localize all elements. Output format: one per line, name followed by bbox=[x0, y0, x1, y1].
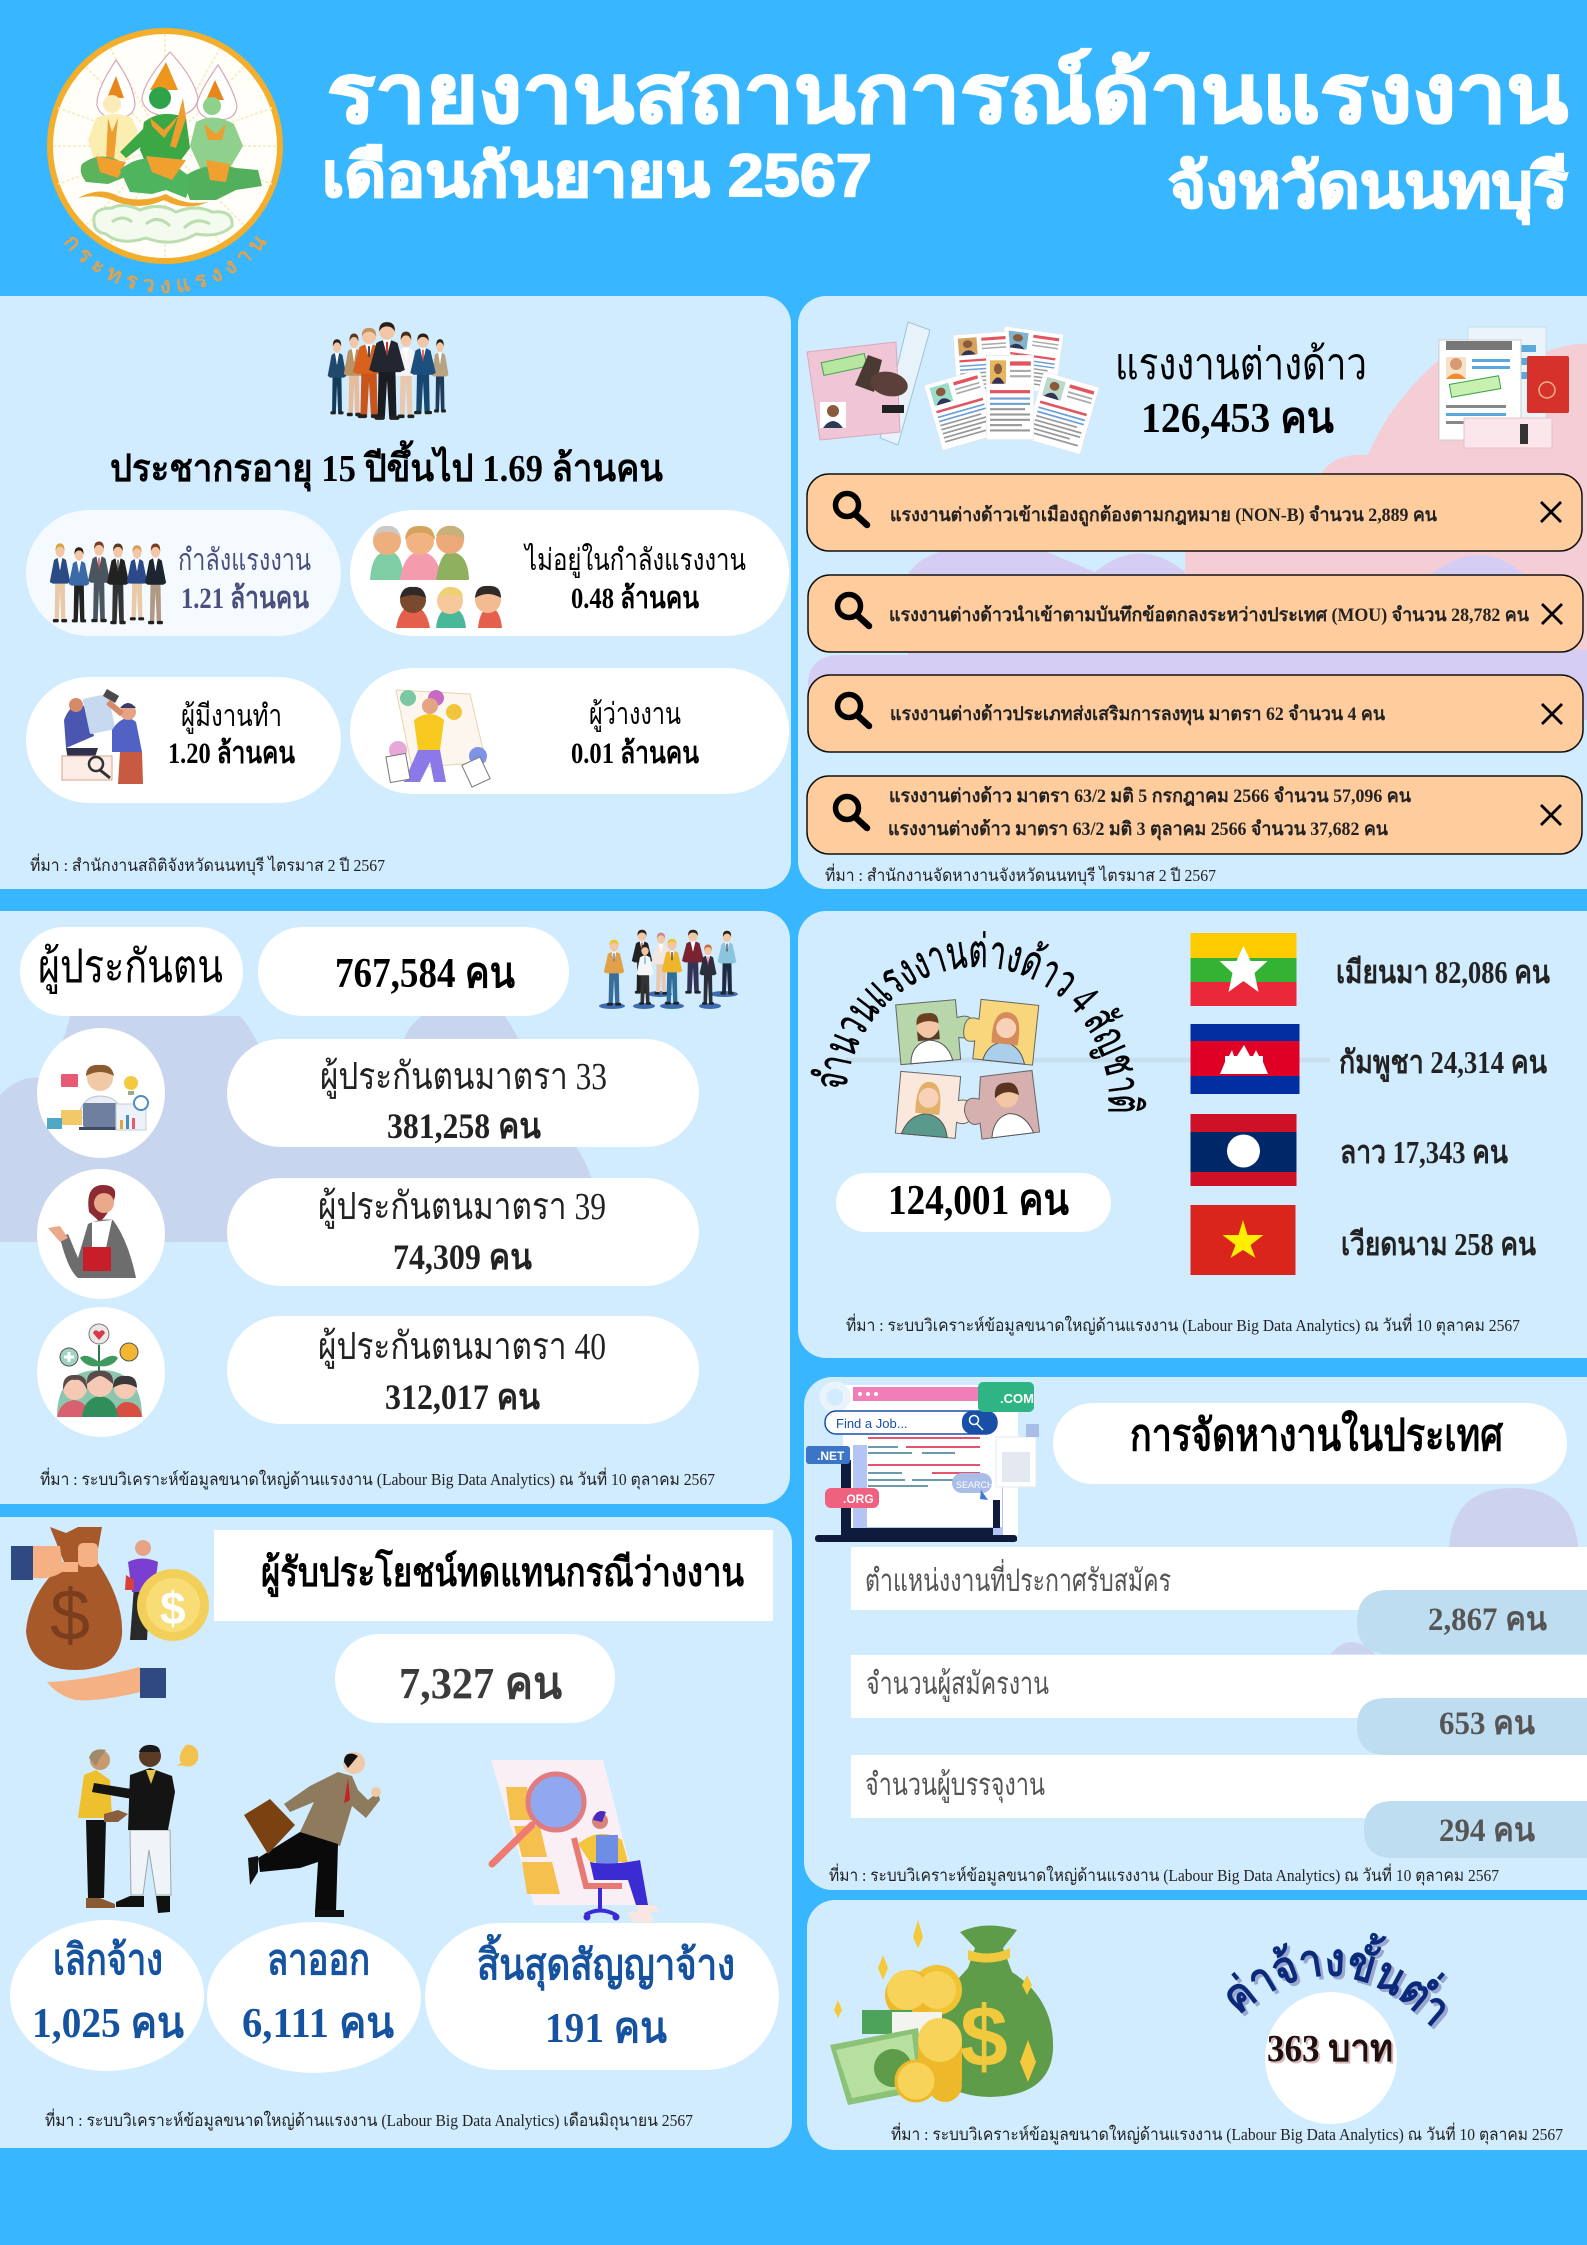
list: foreign worker categories bbox=[807, 474, 1583, 854]
row: job applicants: จำนวนผู้สมัครงาน bbox=[866, 1666, 1049, 1702]
card: labour force bbox=[26, 510, 341, 636]
pill: job placement heading bbox=[1053, 1403, 1567, 1484]
pill: job placement heading: การจัดหางานในประเทศ bbox=[1130, 1409, 1504, 1460]
icon: office worker bbox=[47, 1065, 148, 1130]
badge: minimum wage value bbox=[1265, 1992, 1397, 2124]
text: section 40: ผู้ประกันตนมาตรา 40 bbox=[318, 1326, 606, 1369]
icon: close bbox=[1541, 805, 1561, 825]
card: outside labour force: 0.48 ล้านคน bbox=[571, 582, 699, 615]
panel: foreign workers: 126,453 คน bbox=[1141, 396, 1334, 442]
icon: money bag with coins: $ bbox=[960, 1989, 1008, 2085]
row: section 40 bbox=[37, 1307, 699, 1437]
source note: ที่มา : สำนักงานจัดหางานจังหวัดนนทบุรี ไตรมาส 2 ปี 2567 bbox=[825, 863, 1216, 886]
bubble: resigned: 6,111 คน bbox=[242, 2001, 394, 2047]
flag: Vietnam bbox=[1190, 1205, 1296, 1275]
pill: four nationalities total: 124,001 คน bbox=[888, 1178, 1069, 1224]
card: outside labour force bbox=[350, 510, 789, 636]
scarf bbox=[78, 191, 208, 207]
icon: stack of CVs bbox=[924, 326, 1100, 455]
panel: foreign workers bbox=[798, 296, 1587, 889]
pill: four nationalities total bbox=[836, 1173, 1111, 1232]
row: job vacancies bbox=[851, 1547, 1587, 1654]
row: section 40: 312,017 คน bbox=[385, 1377, 540, 1417]
icon: money bag in hands bbox=[11, 1527, 209, 1700]
icon: elderly and children bbox=[370, 526, 502, 628]
source note: ที่มา : ระบบวิเคราะห์ข้อมูลขนาดใหญ่ด้านแรงงาน (Labour Big Data Analytics) ณ วันที่ 10 ตุลาคม 2567 bbox=[40, 1467, 715, 1490]
text: unemployed: ผู้ว่างงาน bbox=[589, 698, 681, 732]
source note: ที่มา : ระบบวิเคราะห์ข้อมูลขนาดใหญ่ด้านแรงงาน (Labour Big Data Analytics) ณ วันที่ 10 ตุลาคม 2567 bbox=[846, 1313, 1520, 1336]
row: section 63/2: แรงงานต่างด้าว มาตรา 63/2 มติ 3 ตุลาคม 2566 จำนวน 37,682 คน bbox=[888, 818, 1388, 841]
text: section 33: ผู้ประกันตนมาตรา 33 bbox=[320, 1056, 607, 1099]
icon: handshake bbox=[78, 1745, 198, 1913]
panel: domestic job placement bbox=[804, 1377, 1587, 1890]
pill: insured total bbox=[258, 927, 569, 1016]
row: section 62: แรงงานต่างด้าวประเภทส่งเสริมการลงทุน มาตรา 62 จำนวน 4 คน bbox=[890, 703, 1385, 726]
icon: online job search: .NET bbox=[817, 1449, 845, 1463]
icon: businesswoman bbox=[48, 1185, 136, 1278]
heading: insured persons: ผู้ประกันตน bbox=[38, 941, 223, 994]
icon: labour force team bbox=[50, 541, 166, 624]
card: labour force: 1.21 ล้านคน bbox=[181, 582, 309, 615]
flag: Laos bbox=[1190, 1114, 1296, 1186]
icon: close bbox=[1541, 502, 1561, 522]
text: foreign workers total: แรงงานต่างด้าว bbox=[1115, 340, 1367, 389]
icon: online job search: .ORG bbox=[843, 1492, 874, 1506]
text: employed: ผู้มีงานทำ bbox=[181, 700, 282, 734]
card: employed bbox=[26, 677, 341, 803]
icon: online job search bbox=[806, 1382, 1039, 1542]
header logo: Ministry of Labour seal bbox=[47, 28, 283, 294]
left figure bbox=[103, 95, 121, 113]
icon: employed people with plan bbox=[62, 689, 143, 784]
row: placements bbox=[851, 1755, 1587, 1858]
icon: money bag in hands: $ bbox=[50, 1576, 90, 1656]
bubble: contract ended bbox=[425, 1923, 779, 2070]
auras bbox=[97, 60, 135, 118]
card: unemployed bbox=[350, 668, 789, 794]
crowns bbox=[107, 76, 124, 98]
icon: running businessman bbox=[244, 1752, 381, 1917]
icon: search bbox=[836, 494, 867, 525]
badge: minimum wage value: 363 บาท bbox=[1267, 2028, 1393, 2070]
pill: benefit total bbox=[335, 1634, 615, 1723]
text: Laos: ลาว 17,343 คน bbox=[1340, 1134, 1508, 1170]
panel: unemployment benefit bbox=[0, 1517, 792, 2148]
heading: unemployment benefit: ผู้รับประโยชน์ทดแทนกรณีว่างงาน bbox=[261, 1549, 744, 1597]
row: job vacancies: ตำแหน่งงานที่ประกาศรับสมัคร bbox=[865, 1559, 1171, 1598]
pill: insured title bbox=[20, 927, 243, 1016]
row: placements: 294 คน bbox=[1439, 1813, 1535, 1849]
row: MOU: แรงงานต่างด้าวนำเข้าตามบันทึกข้อตกลงระหว่างประเทศ (MOU) จำนวน 28,782 คน bbox=[889, 604, 1529, 626]
source note: ที่มา : สำนักงานสถิติจังหวัดนนทบุรี ไตรมาส 2 ปี 2567 bbox=[30, 853, 385, 876]
icon: money bag in hands: $ bbox=[160, 1582, 186, 1634]
panel: population 15+ bbox=[0, 296, 791, 889]
icon: search bbox=[836, 796, 867, 828]
icon: family benefits bbox=[57, 1324, 142, 1417]
arc heading: four nationalities: จำนวนแรงงานต่างด้าว 4 สัญชาติ bbox=[810, 931, 1146, 1112]
subtitle: month: เดือนกันยายน 2567 bbox=[322, 142, 872, 209]
centre figure bbox=[149, 87, 171, 109]
row: job applicants: 653 คน bbox=[1439, 1706, 1535, 1742]
row: job applicants bbox=[851, 1655, 1587, 1755]
heading: population: ประชากรอายุ 15 ปีขึ้นไป 1.69 ล้านคน bbox=[110, 440, 663, 492]
row: job vacancies: 2,867 คน bbox=[1428, 1602, 1547, 1638]
row: section 63/2: แรงงานต่างด้าว มาตรา 63/2 มติ 5 กรกฎาคม 2566 จำนวน 57,096 คน bbox=[889, 785, 1411, 807]
icon: approved passport and stamp bbox=[807, 322, 930, 445]
bubble: contract ended: สิ้นสุดสัญญาจ้าง bbox=[477, 1933, 735, 1991]
panel: four nationalities bbox=[798, 911, 1587, 1358]
row: section 33: 381,258 คน bbox=[387, 1106, 541, 1146]
icon: online job search: Find a Job... bbox=[836, 1416, 908, 1431]
icon: visa application and passport bbox=[1439, 327, 1569, 448]
bubble: dismissed: เลิกจ้าง bbox=[53, 1938, 163, 1984]
icon: close bbox=[1542, 604, 1562, 624]
icon: group of workers bbox=[328, 322, 448, 420]
card: employed: 1.20 ล้านคน bbox=[168, 737, 295, 770]
card: unemployed: 0.01 ล้านคน bbox=[571, 737, 699, 770]
icon: online job search: .COM bbox=[1000, 1391, 1034, 1406]
row: MOU bbox=[808, 575, 1583, 652]
pill: benefit total: 7,327 คน bbox=[399, 1659, 562, 1708]
source note: ที่มา : ระบบวิเคราะห์ข้อมูลขนาดใหญ่ด้านแรงงาน (Labour Big Data Analytics) เดือนมิถุนายน 2567 bbox=[45, 2108, 693, 2131]
panel: minimum wage bbox=[807, 1900, 1587, 2150]
right figure bbox=[203, 97, 221, 115]
icon: occupations group bbox=[599, 930, 738, 1009]
icon: puzzle faces bbox=[895, 998, 1040, 1141]
text: Vietnam: เวียดนาม 258 คน bbox=[1341, 1226, 1536, 1262]
panel: insured persons bbox=[0, 911, 790, 1504]
icon: unemployed person with resumes bbox=[386, 690, 490, 787]
source note: ที่มา : ระบบวิเคราะห์ข้อมูลขนาดใหญ่ด้านแรงงาน (Labour Big Data Analytics) ณ วันที่ 10 ตุลาคม 2567 bbox=[829, 1863, 1499, 1886]
cloud bbox=[94, 205, 232, 242]
icon: close bbox=[1542, 704, 1562, 724]
row: section 39: 74,309 คน bbox=[393, 1237, 532, 1277]
header logo: Ministry of Labour seal: กระทรวงแรงงาน bbox=[64, 236, 266, 294]
icon: search bbox=[838, 594, 869, 626]
flag: Myanmar bbox=[1190, 933, 1296, 1006]
icon: document search analyst bbox=[491, 1760, 660, 1922]
row: section 39 bbox=[37, 1169, 699, 1299]
row: NON-B bbox=[807, 474, 1582, 551]
flag: Cambodia bbox=[1190, 1024, 1300, 1094]
row: placements: จำนวนผู้บรรจุงาน bbox=[865, 1767, 1045, 1804]
icon: online job search: SEARCH bbox=[956, 1480, 994, 1490]
bubble: dismissed: 1,025 คน bbox=[32, 2001, 184, 2047]
text: section 39: ผู้ประกันตนมาตรา 39 bbox=[318, 1186, 606, 1229]
row: section 63/2 bbox=[807, 776, 1582, 854]
text: Cambodia: กัมพูชา 24,314 คน bbox=[1339, 1044, 1547, 1083]
text: outside labour force: ไม่อยู่ในกำลังแรงงาน bbox=[523, 542, 746, 578]
bubble: dismissed bbox=[10, 1920, 204, 2071]
heading: unemployment benefit bbox=[214, 1530, 773, 1621]
bubble: contract ended: 191 คน bbox=[545, 2006, 667, 2052]
bubble: resigned bbox=[207, 1922, 421, 2073]
row: section 33 bbox=[37, 1028, 699, 1158]
subtitle: province: จังหวัดนนทบุรี bbox=[1168, 152, 1568, 224]
icon: search bbox=[838, 694, 869, 726]
row: NON-B: แรงงานต่างด้าวเข้าเมืองถูกต้องตามกฎหมาย (NON-B) จำนวน 2,889 คน bbox=[890, 504, 1437, 527]
text: labour force: กำลังแรงงาน bbox=[178, 544, 311, 577]
row: section 62 bbox=[808, 675, 1583, 752]
pill: insured total: 767,584 คน bbox=[335, 951, 515, 997]
title: รายงานสถานการณ์ด้านแรงงาน bbox=[327, 48, 1568, 140]
bubble: resigned: ลาออก bbox=[267, 1938, 370, 1984]
arc heading: minimum wage: ค่าจ้างขั้นต่ำ bbox=[1227, 1932, 1448, 2030]
icon: money bag with coins bbox=[830, 1920, 1053, 2105]
